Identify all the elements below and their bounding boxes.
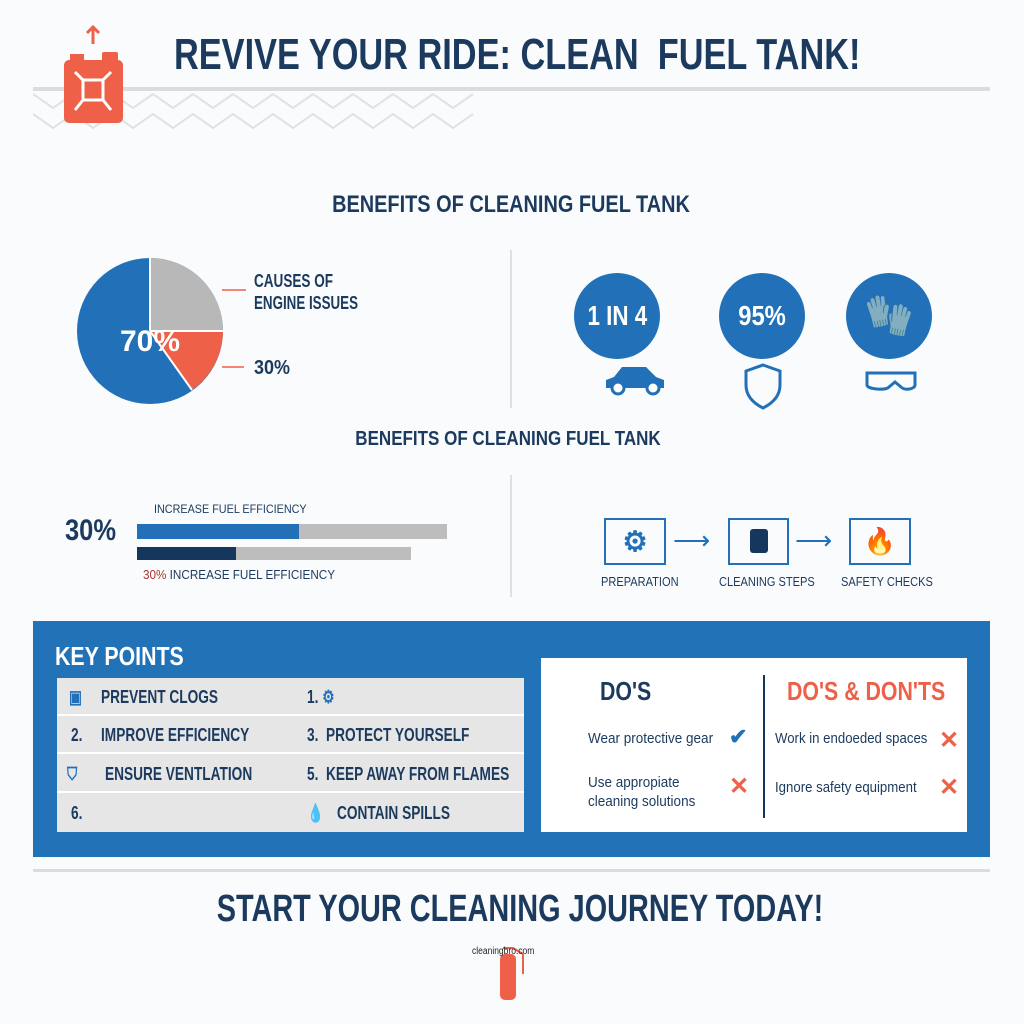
icon: goggles <box>866 372 916 391</box>
panel: dos and donts: cleaning solutions <box>588 793 695 810</box>
pie chart: 30% <box>254 357 290 379</box>
panel: dos and donts <box>541 658 967 832</box>
key points table: IMPROVE EFFICIENCY <box>101 725 249 745</box>
key points table: 3. PROTECT YOURSELF <box>307 725 469 745</box>
icon: shield <box>744 363 782 410</box>
pie chart: CAUSES OF <box>254 271 333 291</box>
key points table <box>57 678 524 832</box>
key points table: 💧 <box>307 803 324 823</box>
pie chart: 70% <box>120 325 180 358</box>
heading: benefits 1: BENEFITS OF CLEANING FUEL TANK <box>332 191 690 218</box>
pie chart <box>77 258 358 404</box>
process flow: 🔥 <box>864 526 896 556</box>
key points table: 5. KEEP AWAY FROM FLAMES <box>307 764 509 784</box>
process flow: PREPARATION <box>601 574 679 589</box>
title: REVIVE YOUR RIDE: CLEAN FUEL TANK! <box>174 30 860 79</box>
bar chart: 30% INCREASE FUEL EFFICIENCY <box>143 567 335 582</box>
panel: dos and donts: Wear protective gear <box>588 730 713 747</box>
stat circles <box>574 273 932 410</box>
key points table: ▣ <box>69 687 82 707</box>
panel: dos and donts: ✕ <box>729 773 749 800</box>
panel: dos and donts: DO'S <box>600 676 651 706</box>
stat: gloves: 🧤 <box>864 294 914 338</box>
panel: dos and donts: Use appropiate <box>588 774 680 791</box>
panel: dos and donts: ✔ <box>729 724 747 749</box>
key points table: 6. <box>71 803 82 823</box>
icon: jerry can <box>64 25 123 123</box>
key points table: 2. <box>71 725 82 745</box>
key points table: CONTAIN SPILLS <box>337 803 450 823</box>
panel: dos and donts: Work in endoeded spaces <box>775 730 927 747</box>
panel: dos and donts: DO'S & DON'TS <box>787 676 945 706</box>
key points table: ENSURE VENTLATION <box>105 764 252 784</box>
icon: car <box>606 367 664 396</box>
panel: dos and donts: ✕ <box>939 774 959 801</box>
call to action: START YOUR CLEANING JOURNEY TODAY! <box>217 888 823 930</box>
stat: 95% <box>719 273 805 359</box>
process flow: ⟶ <box>673 525 710 555</box>
key points table: ⛉ <box>67 764 77 784</box>
stat: 1 in 4: 1 IN 4 <box>587 300 647 331</box>
key points table: 1. ⚙ <box>307 687 334 707</box>
footer url: cleaningbro.com <box>472 946 534 957</box>
bar chart <box>65 502 447 582</box>
heading: benefits 2: BENEFITS OF CLEANING FUEL TANK <box>355 428 661 450</box>
bar chart: INCREASE FUEL EFFICIENCY <box>154 502 307 516</box>
process flow: CLEANING STEPS <box>719 574 815 589</box>
key points table: PREVENT CLOGS <box>101 687 218 707</box>
process flow: ⟶ <box>795 525 832 555</box>
panel: dos and donts: Ignore safety equipment <box>775 779 917 796</box>
stat: 95%: 95% <box>738 300 786 331</box>
bar chart: 30% <box>65 514 116 547</box>
stat: 1 in 4 <box>574 273 660 359</box>
panel: key points <box>33 621 990 857</box>
panel: dos and donts: ✕ <box>939 727 959 754</box>
process flow: ⚙ <box>622 526 648 557</box>
stat: gloves <box>846 273 932 359</box>
heading: key points: KEY POINTS <box>55 641 184 671</box>
process flow <box>601 518 933 589</box>
icon: extinguisher <box>500 947 524 1000</box>
process flow: SAFETY CHECKS <box>841 574 933 589</box>
